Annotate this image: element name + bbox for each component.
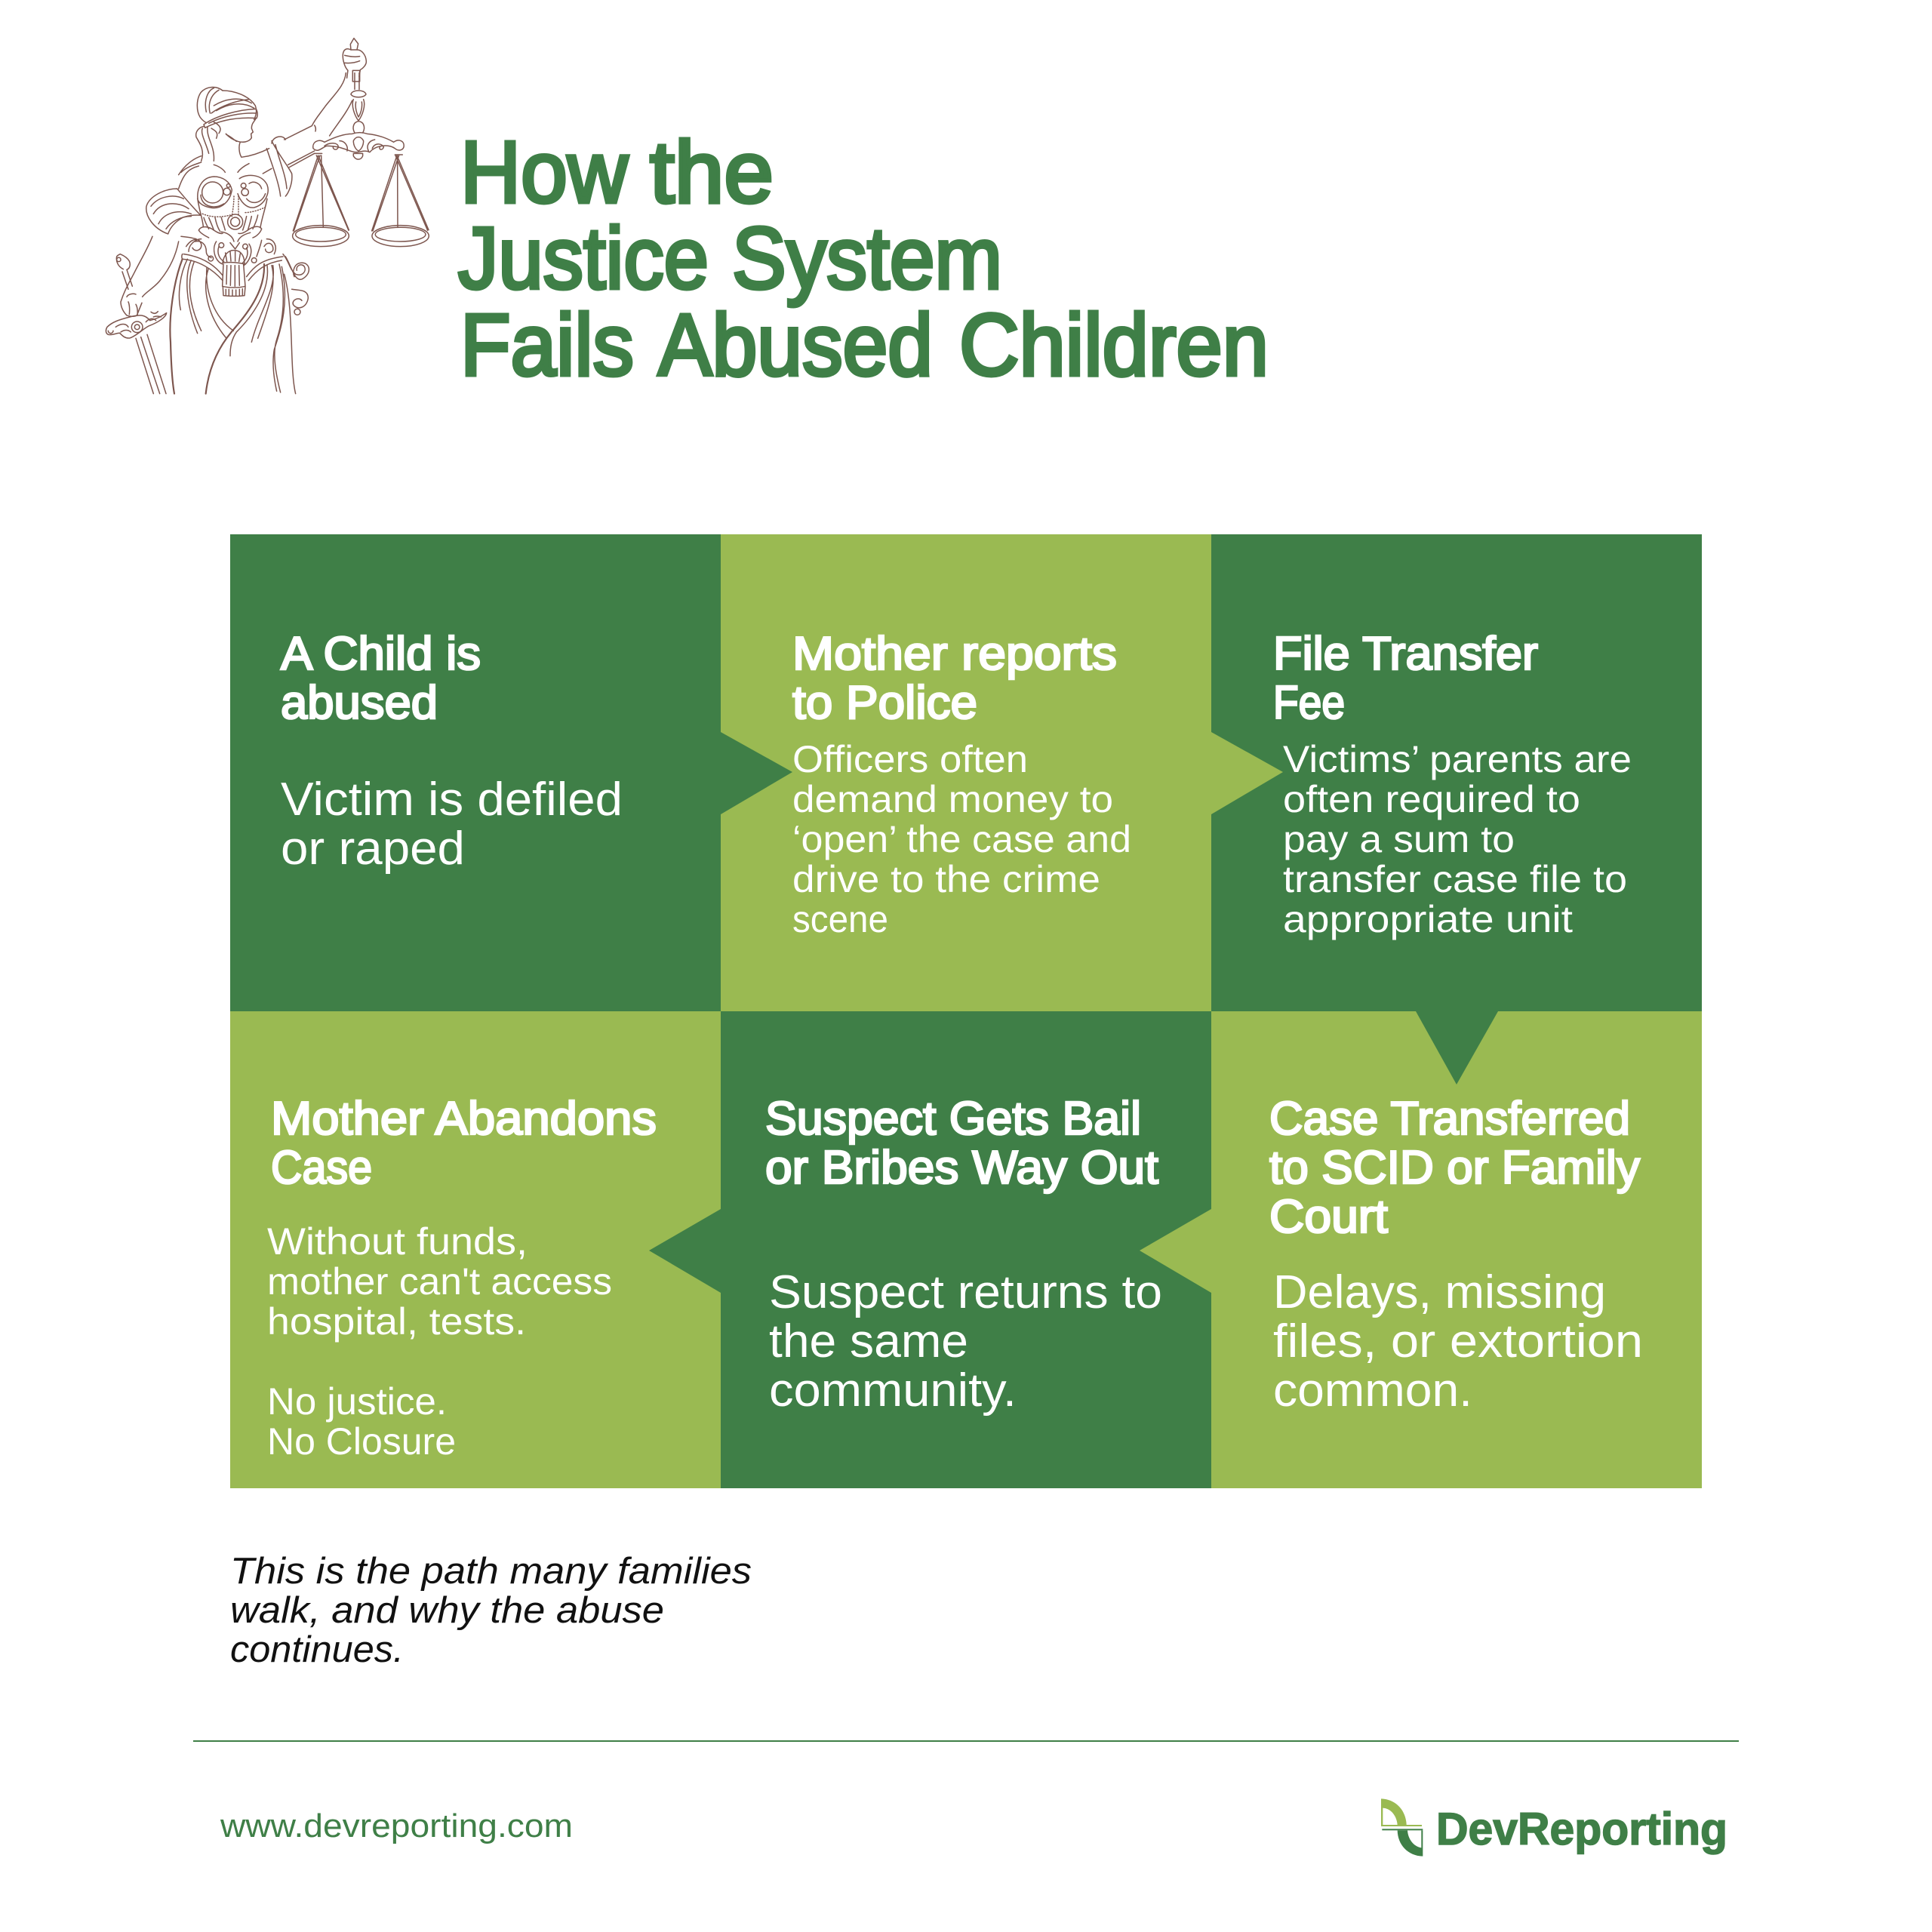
arrow: step 5 to step 6	[649, 1209, 721, 1293]
panel: case transferred: Court	[1269, 1191, 1388, 1243]
panel: mother abandons case: hospital, tests.	[267, 1300, 526, 1343]
title: Children	[959, 296, 1269, 394]
icon: raised arm, sleeve and balance handle	[263, 73, 366, 196]
footer url: www.devreporting.com	[220, 1807, 573, 1844]
panel: case transferred: files, or extortion	[1273, 1315, 1643, 1367]
caption: This is the path many families	[230, 1551, 752, 1592]
icon: skirt, sash, tassel and scrolls	[170, 251, 309, 394]
panel: mother abandons case: Without funds,	[267, 1220, 528, 1263]
panel: mother abandons case	[230, 1011, 721, 1488]
panel: mother reports to police: Officers often	[792, 738, 1028, 780]
panel: file transfer fee: Victims’ parents are	[1283, 738, 1632, 780]
icon: raised hand and finial	[343, 38, 366, 82]
panel: mother abandons case: No justice.	[267, 1380, 447, 1423]
panel: suspect gets bail: or Bribes Way Out	[765, 1142, 1158, 1194]
panel: file transfer fee: often required to	[1283, 778, 1580, 820]
panel: mother reports to police: Mother reports	[792, 628, 1117, 680]
panel: mother abandons case: Case	[271, 1142, 372, 1194]
panel: case transferred: to SCID or Family	[1269, 1142, 1640, 1194]
panel: file transfer fee: transfer case file to	[1283, 858, 1627, 900]
panel: mother reports to police: to Police	[792, 677, 977, 729]
icon: head, hair and blindfold	[181, 88, 269, 172]
arrow: step 1 to step 2	[721, 732, 792, 814]
panel: suspect gets bail	[721, 1011, 1211, 1488]
title: How	[460, 123, 629, 221]
panel: file transfer fee: Fee	[1273, 677, 1345, 729]
title: Abused	[658, 296, 933, 394]
title	[458, 123, 1269, 394]
panel: mother abandons case: No Closure	[267, 1420, 456, 1463]
icon: sword hilt and pommel	[106, 254, 167, 338]
icon: right scale pan	[372, 155, 429, 247]
icon: ornate balance beam	[313, 133, 404, 159]
caption	[230, 1551, 752, 1670]
icon: logo mark	[1381, 1798, 1423, 1857]
panel: case transferred: Case Transferred	[1269, 1093, 1630, 1145]
icon: belt ornaments	[186, 239, 275, 266]
panel: case transferred	[1211, 1011, 1702, 1488]
title: System	[732, 209, 1002, 307]
panel: a child is abused: A Child is	[281, 628, 481, 680]
illustration: Lady Justice with scales and sword	[106, 38, 429, 394]
panel: suspect gets bail: Suspect returns to	[769, 1266, 1162, 1318]
panel: suspect gets bail: the same	[769, 1315, 968, 1367]
panel: suspect gets bail: Suspect Gets Bail	[765, 1093, 1141, 1145]
icon: ornate bodice	[179, 156, 268, 249]
title: Fails	[460, 296, 634, 394]
panel: a child is abused: or raped	[281, 823, 465, 875]
icon: drape over left arm	[146, 166, 201, 234]
panel: a child is abused: abused	[281, 677, 438, 729]
title: the	[650, 123, 774, 221]
panel: mother reports to police	[721, 534, 1211, 1011]
caption: continues.	[230, 1629, 404, 1670]
panel: a child is abused: Victim is defiled	[281, 774, 623, 826]
arrow: step 4 to step 5	[1140, 1209, 1211, 1293]
icon: lowered arm and fist	[121, 236, 196, 316]
arrow: step 3 to step 4	[1416, 1011, 1498, 1084]
panel: file transfer fee: pay a sum to	[1283, 818, 1515, 860]
arrow: step 2 to step 3	[1211, 732, 1283, 814]
panel: mother abandons case: Mother Abandons	[271, 1093, 657, 1145]
panel: case transferred: Delays, missing	[1273, 1266, 1606, 1318]
panel: mother reports to police: scene	[792, 898, 888, 940]
panel: mother abandons case: mother can't access	[267, 1260, 612, 1303]
panel: mother reports to police: demand money to	[792, 778, 1113, 820]
icon: sword blade	[136, 334, 166, 394]
panel: file transfer fee	[1211, 534, 1702, 1011]
title: Justice	[458, 209, 709, 307]
panel: mother reports to police: ‘open’ the case and	[792, 818, 1131, 860]
panel: suspect gets bail: community.	[769, 1364, 1017, 1417]
icon: left scale pan	[293, 155, 349, 247]
panel: mother reports to police: drive to the crime	[792, 858, 1100, 900]
caption: walk, and why the abuse	[230, 1590, 664, 1631]
panel: a child is abused	[230, 534, 721, 1011]
logo: DevReporting: DevReporting	[1436, 1804, 1727, 1854]
panel: case transferred: common.	[1273, 1364, 1472, 1417]
panel: file transfer fee: appropriate unit	[1283, 898, 1573, 940]
panel: file transfer fee: File Transfer	[1273, 628, 1538, 680]
